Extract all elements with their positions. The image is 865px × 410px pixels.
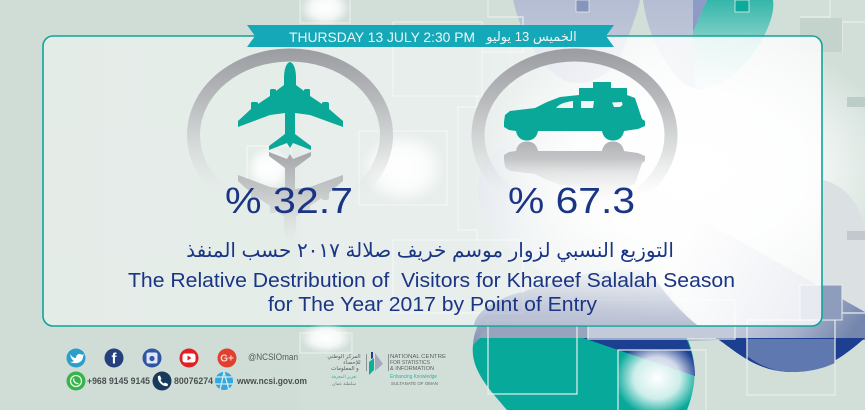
logo arabic name: للإحصاء (343, 360, 361, 366)
handle: @NCSIOman (248, 352, 298, 362)
icon: twitter (66, 348, 86, 368)
logo english name: NATIONAL CENTRE (390, 354, 447, 360)
icon: youtube (180, 348, 198, 368)
icon: globe (215, 372, 233, 390)
value: car share: % 67.3 (508, 180, 635, 221)
main panel (43, 36, 822, 326)
glow squares (247, 0, 447, 353)
ribbon: date (247, 25, 614, 47)
icon: whatsapp (66, 372, 86, 390)
logo english name: SULTANATE OF OMAN (391, 381, 438, 386)
english title line 2: for The Year 2017 by Point of Entry (268, 294, 597, 316)
logo mark (369, 352, 383, 375)
icon: instagram (142, 348, 162, 368)
car reflection (504, 142, 645, 200)
icon: google plus (218, 348, 236, 368)
website: www.ncsi.gov.om (236, 376, 307, 387)
navy lower blob (716, 338, 865, 372)
english title line 1: The Relative Destribution of Visitors for Khareef Salalah Season (128, 270, 735, 292)
phone number: 80076274 (174, 376, 214, 387)
logo english name: & INFORMATION (390, 366, 434, 372)
value: plane share: % 32.7 (225, 180, 353, 221)
social icons and contacts (66, 348, 307, 390)
plane reflection (238, 152, 343, 240)
arabic title: التوزيع النسبي لزوار موسم خريف صلالة ٢٠١٧ حسب المنفذ (186, 240, 674, 263)
logo arabic name: سلطنة عمان (332, 381, 356, 386)
logo arabic name: تعزيز المعرفة (331, 374, 357, 379)
ring: plane (194, 55, 386, 215)
logo english name: Enhancing Knowledge (390, 374, 437, 380)
icon: facebook: f (112, 350, 118, 368)
navy wedge (583, 338, 695, 376)
logo english name (390, 354, 447, 386)
teal lower blob (473, 338, 694, 410)
icon: facebook (104, 348, 124, 368)
ribbon date text english: THURSDAY 13 JULY 2:30 PM (289, 29, 475, 45)
logo arabic name (327, 353, 361, 386)
ribbon date text arabic: الخميس 13 يوليو (485, 29, 577, 45)
logo english name: FOR STATISTICS (390, 360, 431, 366)
icon: plane (238, 62, 343, 150)
panel lower tint (474, 269, 697, 325)
icon: google plus: G+ (220, 354, 234, 364)
background shapes (247, 0, 865, 410)
whatsapp number: +968 9145 9145 (87, 376, 151, 387)
logo arabic name: المركز الوطني (327, 353, 361, 360)
icon: car (504, 82, 645, 140)
ring: car (478, 55, 671, 215)
logo: NCSI (327, 352, 447, 386)
icon: phone (152, 372, 172, 390)
logo arabic name: و المعلومات (331, 366, 359, 372)
